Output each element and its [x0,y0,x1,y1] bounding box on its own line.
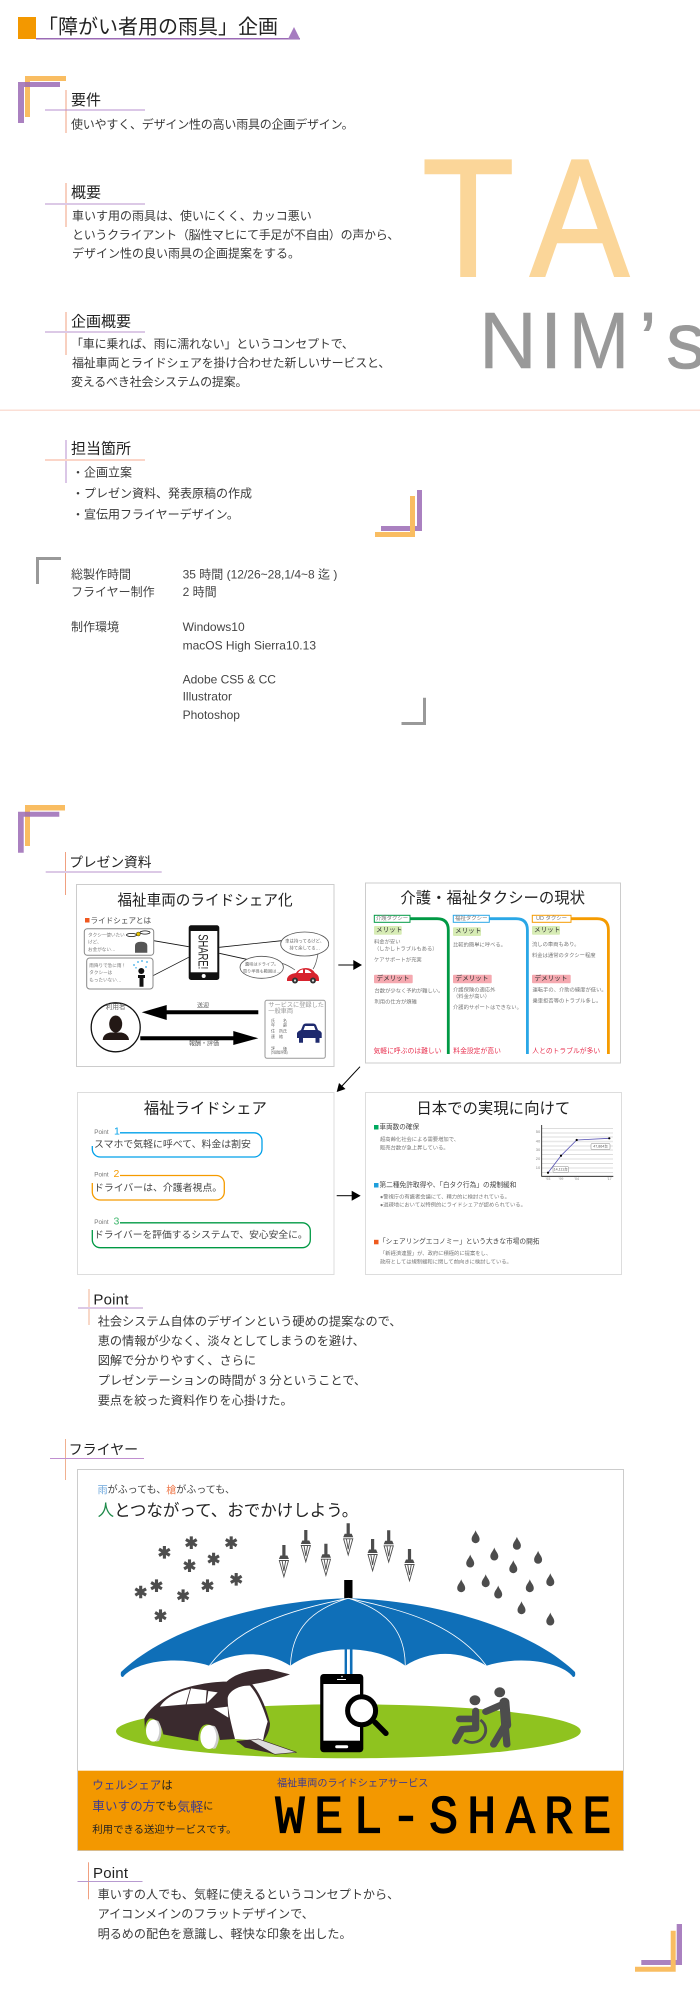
section: 企画概要 [45,312,390,389]
arrow: slide 2 to slide 3 [337,1067,360,1092]
text block: flyer point: 明るめの配色を意識し、軽快な印象を出した。 [98,1927,352,1941]
corner bracket: section two [18,805,65,853]
text block: presentation point: 図解で分かりやすく、さらに [98,1354,256,1368]
slide title: 福祉ライドシェア [144,1100,267,1118]
card: registered vehicle: 氏 名 [271,1017,287,1023]
section: 概要: というクライアント（脳性マヒにて手足が不自由）の声から、 [72,227,399,242]
section: 担当箇所: 担当箇所 [71,440,131,458]
column: UD taxi: 料金は通常のタクシー程度 [532,951,596,959]
column: welfare taxi: 介護的サポートはできない。 [453,1003,522,1011]
user box: rain [87,958,153,989]
column: UD taxi [532,914,608,1055]
column: welfare taxi: デメリット [456,974,488,982]
large lettering: NIM's [479,296,700,386]
column: welfare taxi: 比較的簡単に呼べる。 [453,940,506,948]
large lettering: NIM's: I [540,296,562,385]
section: 担当箇所: ・企画立案 [72,465,132,479]
point 1: 1 [114,1126,120,1138]
block: sharing economy: 「シェアリングエコノミー」という大きな市場の開拓 [379,1236,540,1246]
arrow: reward and rating: 報酬・評価 [189,1040,219,1048]
section heading: フライヤー: フライヤー [69,1441,138,1457]
point 1: スマホで気軽に呼べて、料金は割安 [94,1138,251,1150]
flyer tagline large: 人とつながって、おでかけしよう。 [98,1501,358,1520]
line chart: 47,864台 [593,1144,608,1148]
point 2: 2 [114,1168,120,1180]
point 1: Point [94,1129,109,1136]
text block: flyer point: Point [93,1865,129,1882]
section: 要件: 要件 [71,92,101,109]
line chart: '04 [574,1177,579,1181]
icon: falling snow [135,1536,242,1622]
card: registered vehicle [265,1000,325,1058]
panel: slide 3 welfare ride share [78,1092,334,1274]
production details [71,566,337,722]
panel: flyer [78,1470,624,1850]
user box: no money: けど、 [88,938,102,946]
large lettering: NIM's: M [569,297,629,386]
large lettering: NIM's: N [479,296,537,385]
production details: Windows10 [183,620,245,634]
column: care taxi [374,914,448,1055]
icon: green ground [116,1704,581,1758]
block: sharing economy: 「新経済連盟」が、政府に積極的に提案をし、 [380,1249,491,1257]
block: number of vehicles [374,1122,459,1151]
column: welfare taxi: 料金設定が高い [453,1046,501,1055]
column: care taxi: ケアサポートが充実 [374,955,422,963]
section: 概要: デザイン性の良い雨具の企画提案をする。 [72,246,300,261]
section: 担当箇所: ・宣伝用フライヤーデザイン。 [72,506,239,521]
production details: 2 時間 [183,585,217,599]
point 3: 3 [114,1216,120,1228]
banner copy: 車いすの方でも気軽に [92,1799,213,1814]
section heading: プレゼン資料: プレゼン資料 [69,855,152,870]
point 1 [92,1126,262,1157]
block: number of vehicles: 車両数の確保 [380,1122,419,1131]
text block: flyer point [78,1862,399,1941]
banner copy [92,1779,237,1836]
column: care taxi: 台数が少なく予約が難しい。 [374,987,443,995]
banner copy: 利用できる送迎サービスです。 [92,1823,237,1836]
column: welfare taxi [453,914,527,1055]
line chart [536,1125,613,1181]
icon: wheelchair vehicle [144,1669,297,1754]
icon: wheelchair and caregiver [456,1687,507,1744]
text block: flyer point: 車いすの人でも、気軽に使えるというコンセプトから、 [98,1886,399,1901]
corner bracket: grey top left [36,557,61,584]
column: care taxi: 利用の仕方が煩雑 [374,998,418,1006]
speech bubble: driver one: 持て余してる… [289,944,320,952]
line chart: '99 [559,1177,563,1181]
column: UD taxi: UD タクシー [536,914,567,922]
production details: Illustrator [183,690,232,704]
column: welfare taxi: 介護保険の適応外 [453,986,496,994]
large lettering: TA: A [530,123,629,312]
speech bubble: driver one [281,932,329,969]
text block: presentation point: 社会システム自体のデザインという硬めの提案なので、 [98,1313,402,1328]
icon: umbrella [121,1580,575,1677]
block: number of vehicles: 超高齢化社会による需要増加で、 [380,1135,459,1143]
banner copy: ウェルシェアは [92,1779,173,1792]
slide title: 福祉車両のライドシェア化 [117,892,293,909]
text block: presentation point: プレゼンテーションの時間が 3 分ということで、 [98,1372,366,1387]
text block: presentation point: 恵の情報が少なく、淡々としてしまうのを避け、 [98,1333,365,1348]
section: 企画概要: 福祉車両とライドシェアを掛け合わせた新しいサービスと、 [72,355,390,370]
section: 概要: 車いす用の雨具は、使いにくく、カッコ悪い [72,208,312,223]
block: sharing economy [374,1236,540,1266]
block: sharing economy: 政府としては規制緩和に関して前向きに検討している。 [380,1258,512,1266]
column: care taxi: 気軽に呼ぶのは難しい [374,1046,442,1055]
column: welfare taxi: 福祉タクシー [455,914,487,922]
column: care taxi: 料金が安い [374,938,400,946]
speech bubble: driver two [240,956,295,978]
line chart: 10 [536,1165,541,1170]
point 3: ドライバーを評価するシステムで、安心安全に。 [94,1228,308,1241]
speech bubble: driver one: 車は持ってるけど、 [285,938,324,944]
column: care taxi: デメリット [376,974,409,982]
card: registered vehicle: サービスに登録した [268,1001,324,1009]
panel: slide 1 ride share [76,884,334,1066]
text block: flyer point: アイコンメインのフラットデザインで、 [98,1906,314,1921]
production details: 制作環境 [71,620,119,634]
user box: no money [84,929,154,955]
icon: red car [287,968,319,984]
corner bracket: top left [18,76,66,123]
user box: no money: タクシー使いたい [88,932,125,938]
card: registered vehicle: 連 絡 [271,1033,283,1039]
block: deregulation: ●警視庁の有識者会議にて、精力的に検討されている。 [380,1192,510,1200]
line chart: 14,111台 [554,1166,568,1172]
phone SHARE [189,925,219,980]
user box: rain: タクシーは [89,969,113,976]
section: 概要: 概要 [71,184,101,202]
column: UD taxi: 運転手の、介助の練度が低い。 [532,986,607,994]
card: registered vehicle: 住 所氏 [271,1028,287,1034]
panel: slide 4 towards Japan [366,1092,622,1274]
icon: falling rain drops [457,1530,554,1626]
line chart: 50 [536,1129,541,1134]
icon: falling spears [279,1523,414,1581]
slide title: 介護・福祉タクシーの現状 [400,889,585,907]
user box: rain: もったいない… [89,976,121,984]
large lettering: NIM's: ’ [639,296,657,385]
block: deregulation [374,1180,526,1209]
card: registered vehicle: (5段階評価) [271,1050,288,1055]
title: 「障がい者用の雨具」企画 [38,16,278,38]
column: welfare taxi: （料金が高い） [453,992,490,1000]
section: 企画概要: 「車に乗れば、雨に濡れない」というコンセプトで、 [71,337,354,351]
orange banner [78,1771,623,1850]
large lettering: TA: T [422,124,514,312]
point 2 [92,1168,224,1200]
line chart: 20 [536,1156,541,1161]
icon: user circle [91,1002,140,1052]
user box: rain: 雨降りで急に雨！ [89,962,126,969]
section: 要件: 使いやすく、デザイン性の高い雨具の企画デザイン。 [71,116,353,131]
point 2: ドライバーは、介護者視点。 [94,1181,222,1194]
arrow: slide 1 to slide 2 [338,960,362,970]
column: UD taxi: デメリット [534,974,567,982]
column: welfare taxi: メリット [455,928,481,935]
logotype WEL-SHARE: WEL-SHARE [275,1788,611,1849]
section: 企画概要: 企画概要 [71,314,131,330]
corner bracket: middle right [375,490,422,537]
corner bracket: bottom right [635,1924,682,1972]
production details: 総製作時間 [71,566,131,581]
block: deregulation: 第二種免許取得や、「白タク行為」の規制緩和 [380,1180,517,1189]
production details: 35 時間 (12/26~28,1/4~8 迄 ) [183,567,337,581]
column: care taxi: 介護タクシー [376,914,408,922]
card: registered vehicle: 評 価 [271,1045,287,1051]
icon: user circle: 利用者 [106,1002,126,1011]
column: UD taxi: メリット [534,927,560,934]
flyer tagline small: 雨がふっても、槍がふっても、 [98,1483,235,1496]
production details: macOS High Sierra10.13 [183,639,316,653]
arrow: slide 3 to slide 4 [337,1191,361,1201]
section: 要件 [45,90,353,133]
production details: フライヤー制作 [71,585,155,599]
block: number of vehicles: 販売台数が急上昇している。 [380,1143,449,1151]
production details: Photoshop [183,708,240,722]
subheading: ライドシェアとは [90,916,152,925]
connecting lines [153,941,282,976]
panel: slide 2 taxi status [366,883,620,1063]
section: 担当箇所 [45,440,252,521]
line chart: 30 [536,1147,541,1152]
icon: smartphone with magnifier [320,1674,386,1752]
corner bracket: grey bottom right [402,698,426,725]
slide title: 日本での実現に向けて [416,1100,570,1118]
section: 担当箇所: ・プレゼン資料、発表原稿の作成 [72,486,252,500]
arrow: pick up [142,1002,258,1020]
text block: presentation point: 要点を絞った資料作りを心掛けた。 [98,1393,293,1408]
section: 概要 [45,183,399,261]
block: deregulation: ●過疎地において以特例的にライドシェアが認められている。 [380,1201,526,1209]
line chart: '93 [546,1177,550,1181]
point 2: Point [94,1172,109,1178]
speech bubble: driver two: 趣味はドライブ。 [245,960,278,968]
card: registered vehicle: 年 齢 [271,1022,287,1028]
text block: presentation point: Point [93,1292,129,1308]
column: UD taxi: 流しの車両もあり。 [532,940,580,948]
service name: 福祉車両のライドシェアサービス [277,1776,428,1790]
card: registered vehicle: 一般車両 [268,1007,293,1015]
section: 企画概要: 変えるべき社会システムの提案。 [71,374,247,389]
large lettering: TA [422,123,629,312]
section heading: プレゼン資料 [46,852,162,895]
section heading: フライヤー [50,1439,144,1480]
arrow: reward and rating [140,1031,258,1048]
user box: no money: お金がない… [88,946,116,953]
phone SHARE: SHARE! [196,934,212,969]
column: care taxi: （しかしトラブルもある） [374,944,438,952]
point 3 [92,1216,310,1248]
text block: presentation point [78,1289,402,1408]
arrow: pick up: 送迎 [197,1002,209,1010]
column: UD taxi: 乗車拒否等のトラブル多し。 [532,997,601,1005]
line chart: 40 [536,1138,541,1144]
column: care taxi: メリット [376,927,402,934]
production details: Adobe CS5 & CC [183,672,276,686]
line chart: '17 [607,1177,612,1181]
column: UD taxi: 人とのトラブルが多い [532,1046,600,1055]
point 3: Point [94,1219,109,1226]
speech bubble: driver two: 周り半径も範囲は… [243,968,281,974]
